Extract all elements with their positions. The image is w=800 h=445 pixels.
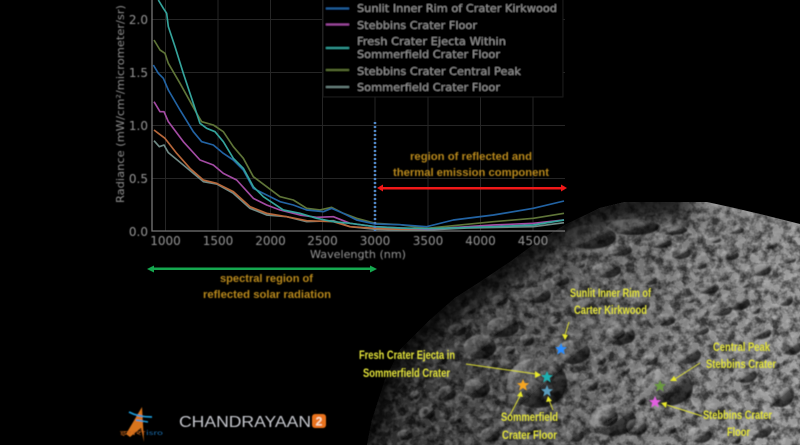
label: central peak: Stebbins Crater <box>706 357 776 371</box>
callout: reflected and thermal region: region of reflected and <box>410 151 532 163</box>
star: Stebbins floor <box>649 396 661 408</box>
x axis tick labels: 3500 <box>413 234 443 248</box>
label: Sommerfield floor: Crater Floor <box>502 428 557 442</box>
arrow: green double-headed <box>147 266 377 272</box>
curve: orange <box>154 130 427 229</box>
callout: reflected solar region: reflected solar radiation <box>203 289 331 301</box>
curve: Stebbins Crater Floor <box>154 102 564 229</box>
arrow: red double-headed <box>377 184 567 192</box>
spectral curves <box>153 0 564 230</box>
legend labels: Fresh Crater Ejecta Within <box>357 35 506 48</box>
callout: reflected solar region: spectral region of <box>220 273 313 285</box>
map markers: stars <box>517 343 666 408</box>
curve: Stebbins Crater Central Peak <box>154 40 564 228</box>
legend labels: Sommerfield Crater Floor <box>357 48 500 61</box>
legend line swatches <box>326 8 349 87</box>
x axis tick labels: 2500 <box>307 234 338 248</box>
curve: Sommerfield Crater Floor <box>154 141 564 230</box>
label: Kirkwood <box>570 286 652 317</box>
label: Stebbins floor: Floor <box>727 425 750 439</box>
arrow: to Stebbins floor <box>661 402 702 416</box>
y axis tick labels: 0.0 <box>129 225 148 239</box>
arrow: to Kirkwood rim <box>562 322 569 340</box>
label: fresh ejecta: Fresh Crater Ejecta in <box>359 348 455 362</box>
label: fresh ejecta <box>359 348 455 380</box>
label: Kirkwood: Carter Kirkwood <box>574 303 647 317</box>
wordmark: Chandrayaan 2: 2 <box>316 414 323 428</box>
callout: reflected and thermal region: thermal emission component <box>393 167 549 179</box>
wordmark: Chandrayaan 2: CHANDRAYAAN <box>179 414 311 431</box>
x axis tick labels: 1000 <box>150 234 181 248</box>
star: Stebbins central peak <box>654 380 666 392</box>
y axis title: Radiance (mW/cm²/micrometer/sr) <box>114 5 127 203</box>
lunar surface photograph <box>360 195 800 445</box>
x axis tick labels: 1500 <box>203 234 233 248</box>
legend labels: Sommerfield Crater Floor <box>357 81 500 94</box>
callout: reflected solar region <box>203 273 331 301</box>
legend labels: Stebbins Crater Floor <box>357 19 477 32</box>
label: central peak: Central Peak <box>713 340 770 354</box>
y axis tick labels: 0.5 <box>129 172 148 186</box>
label: Sommerfield floor <box>501 410 558 442</box>
dotted divider at 3000 nm <box>374 122 376 231</box>
label: Stebbins floor <box>703 408 772 439</box>
curve: Sunlit Inner Rim of Crater Kirkwood <box>153 65 564 227</box>
arrow: to Sommerfield floor blue <box>546 396 553 410</box>
y axis tick labels <box>129 13 148 239</box>
label: Stebbins floor: Stebbins Crater <box>703 408 772 422</box>
x axis tick labels: 2000 <box>255 234 286 248</box>
star: Sommerfield floor orange <box>517 379 529 390</box>
icon: ISRO logo: इसरो <box>120 428 146 437</box>
star: Sommerfield floor blue <box>541 385 553 396</box>
legend labels <box>357 2 557 94</box>
y axis tick labels: 1.5 <box>129 66 148 80</box>
x axis tick labels: 4000 <box>465 234 496 248</box>
star: Kirkwood rim <box>555 343 567 354</box>
callout: reflected and thermal region <box>393 151 549 179</box>
arrow: to Stebbins peak <box>670 363 700 381</box>
x axis tick labels: 4500 <box>518 234 548 248</box>
x axis tick labels: 3000 <box>360 234 390 248</box>
legend <box>323 0 563 97</box>
legend labels: Sunlit Inner Rim of Crater Kirkwood <box>357 2 557 15</box>
icon: ISRO logo: isro <box>146 428 164 437</box>
arrow: to Sommerfield floor orange <box>510 391 523 415</box>
y axis tick labels: 2.0 <box>129 13 148 27</box>
y axis tick labels: 1.0 <box>129 119 148 133</box>
map arrows <box>466 322 702 416</box>
label: Sommerfield floor: Sommerfield <box>501 410 558 424</box>
map labels <box>359 286 776 442</box>
arrow: to fresh ejecta <box>466 364 541 378</box>
grid lines and axes <box>152 0 565 231</box>
x axis title: Wavelength (nm) <box>310 248 406 261</box>
label: central peak <box>706 340 776 371</box>
label: fresh ejecta: Sommerfield Crater <box>363 366 450 380</box>
icon: ISRO logo <box>120 407 164 442</box>
x axis tick labels <box>150 234 548 248</box>
label: Kirkwood: Sunlit Inner Rim of <box>570 286 652 300</box>
curve: Fresh Crater Ejecta <box>158 0 564 229</box>
star: fresh ejecta <box>541 371 553 382</box>
legend labels: Stebbins Crater Central Peak <box>357 65 522 78</box>
chart: radiance vs wavelength <box>114 0 565 261</box>
